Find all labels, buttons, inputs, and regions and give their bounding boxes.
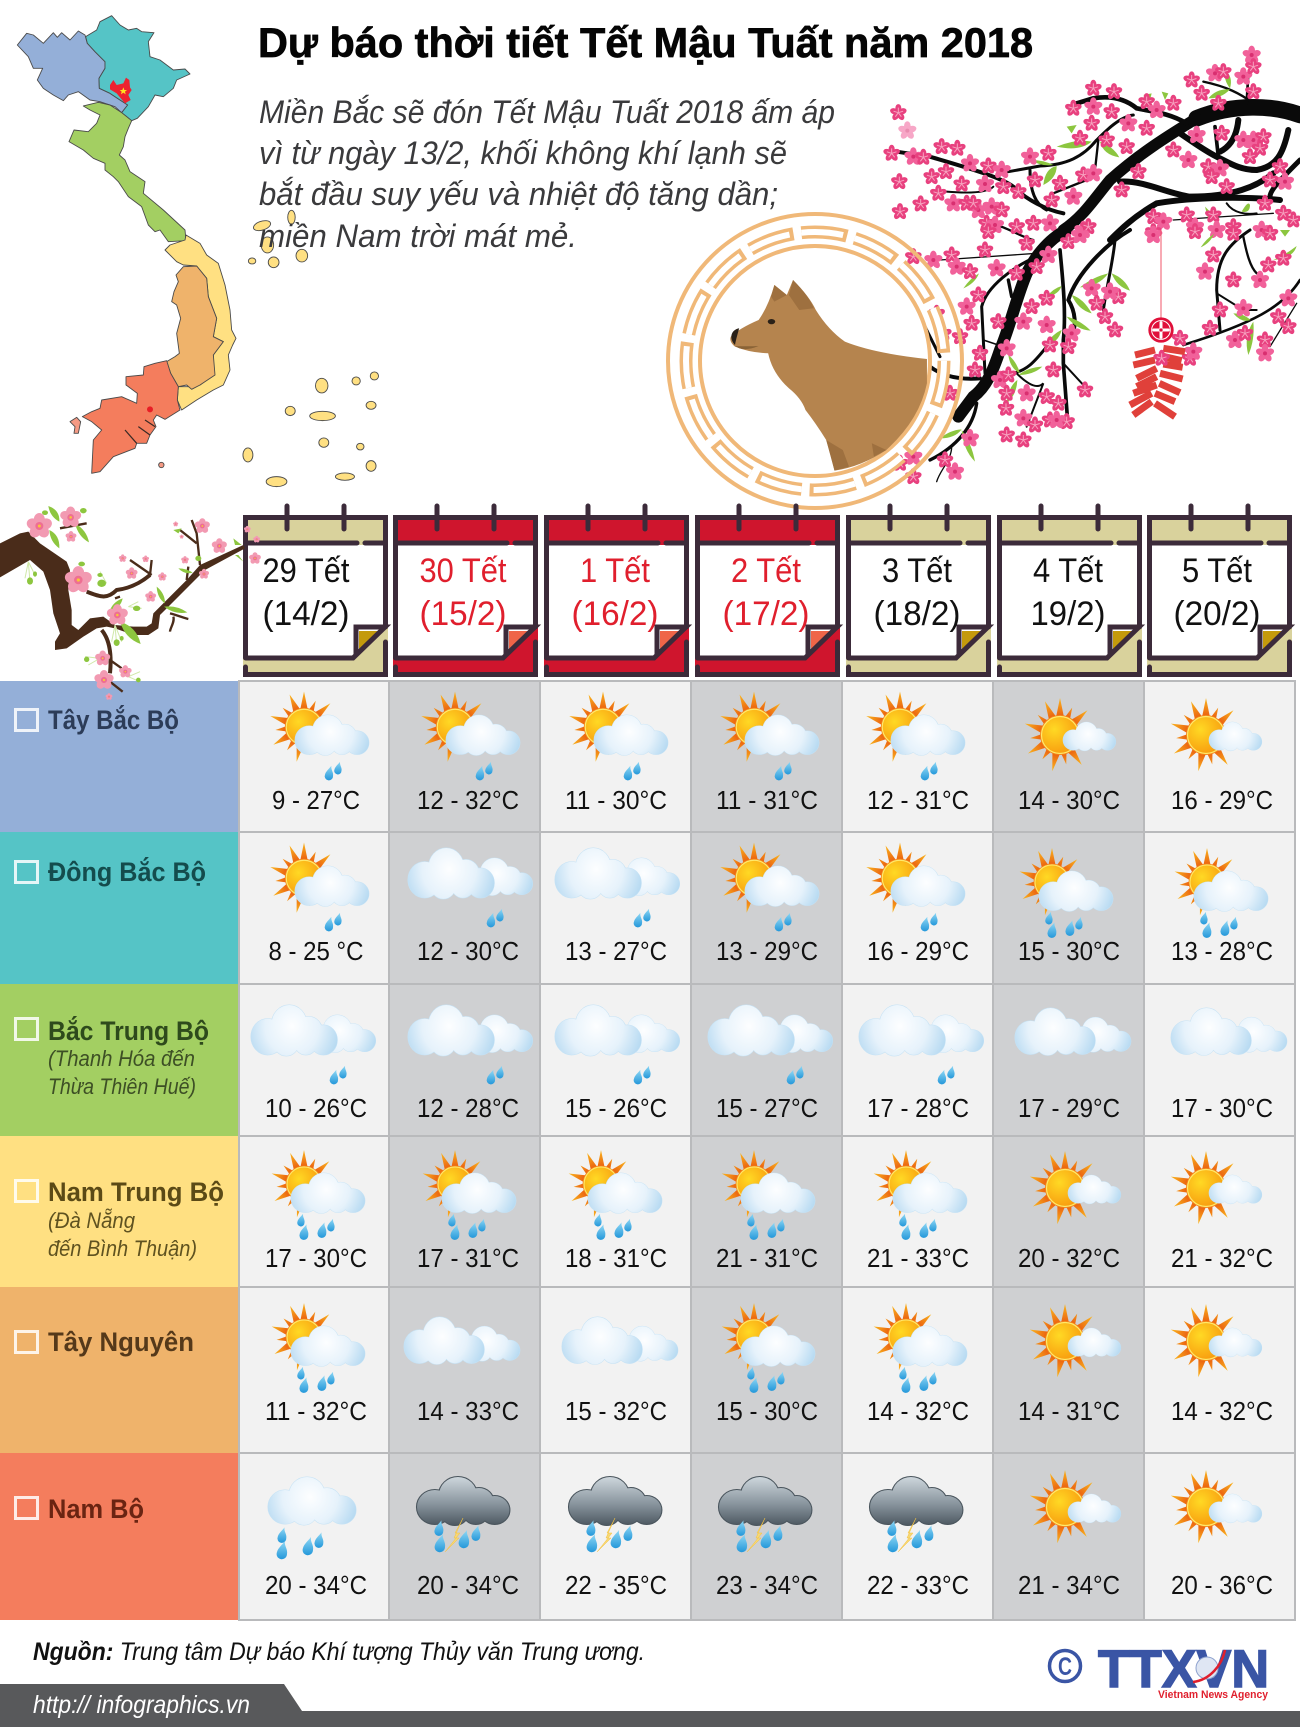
cell: Bắc Trung Bộ 20/2: 17 - 30°C [1171,1093,1273,1123]
cell: Nam Trung Bộ 18/2: 21 - 33°C [867,1243,969,1273]
map: Côn Đảo island [159,462,164,468]
cell: Đông Bắc Bộ 17/2 [691,832,842,984]
region label: Nam Bộ: Nam Bộ [48,1494,144,1524]
intro text: bắt đầu suy yếu và nhiệt độ tăng dần; [259,176,778,212]
cell: Đông Bắc Bộ 15/2: 12 - 30°C [417,936,519,966]
cell: Bắc Trung Bộ 16/2: 15 - 26°C [565,1093,667,1123]
peach blossom branch, lower part [891,223,1300,485]
cell: Đông Bắc Bộ 19/2: 15 - 30°C [1018,936,1120,966]
cell: Đông Bắc Bộ 18/2: 16 - 29°C [867,936,969,966]
cell: Tây Bắc Bộ 16/2: 11 - 30°C [565,785,667,815]
cell: Tây Bắc Bộ 18/2 [842,681,993,832]
map region: Nam Trung Bộ [165,235,236,410]
pale blossom stems [25,562,142,682]
cell: Đông Bắc Bộ 16/2: 13 - 27°C [565,936,667,966]
region label: Tây Nguyên: Tây Nguyên [48,1327,194,1357]
cell: Tây Nguyên 14/2: 11 - 32°C [265,1396,367,1426]
cell: Nam Trung Bộ 14/2 [239,1136,389,1287]
map: Hà Nội [110,78,132,103]
intro text [259,94,835,254]
TTXVN logo [1050,1640,1269,1701]
cell: Nam Bộ 17/2: 23 - 34°C [716,1570,818,1600]
lower leaves [940,234,1297,462]
map region: Đông Bắc Bộ [86,16,190,121]
intro text: miền Nam trời mát mẻ. [259,218,577,254]
cell: Nam Trung Bộ 16/2 [540,1136,691,1287]
cell: Nam Bộ 20/2: 20 - 36°C [1171,1570,1273,1600]
calendar: 29 Tết: (14/2) [262,595,350,633]
cell: Tây Bắc Bộ 15/2 [389,681,540,832]
calendar: 1 Tết [544,506,689,677]
region label: Nam Bộ [0,1453,238,1620]
twigs [87,575,150,673]
fine twigs [60,520,200,692]
cell: Tây Bắc Bộ 14/2 [239,681,389,832]
cell: Tây Nguyên 16/2: 15 - 32°C [565,1396,667,1426]
cell: Bắc Trung Bộ 15/2: 12 - 28°C [417,1093,519,1123]
cell: Nam Trung Bộ 20/2 [1144,1136,1295,1287]
leaves [48,506,243,644]
cell: Tây Bắc Bộ 19/2: 14 - 30°C [1018,785,1120,815]
cell: Nam Bộ 14/2: 20 - 34°C [265,1570,367,1600]
region label: Bắc Trung Bộ: (Thanh Hóa đến [48,1046,195,1071]
peach blossom branch, upper part [883,46,1300,242]
cell: Tây Bắc Bộ 20/2: 16 - 29°C [1171,785,1273,815]
cell: Nam Trung Bộ 14/2: 17 - 30°C [265,1243,367,1273]
cell: Nam Bộ 20/2 [1144,1453,1295,1620]
cell: Bắc Trung Bộ 16/2 [540,984,691,1136]
upper leaves [1032,70,1290,237]
cell: Bắc Trung Bộ 18/2: 17 - 28°C [867,1093,969,1123]
region label: Nam Trung Bộ: Nam Trung Bộ [48,1177,224,1207]
cell: Nam Trung Bộ 19/2: 20 - 32°C [1018,1243,1120,1273]
map of Vietnam [17,16,379,487]
cell: Nam Bộ 18/2 [842,1453,993,1620]
wordmark: TTXVN [1098,1640,1269,1699]
ring [668,214,962,508]
source note: Nguồn: Trung tâm Dự báo Khí tượng Thủy văn Trung ương. [33,1638,645,1666]
copyright mark: C [1058,1653,1072,1681]
region label: Bắc Trung Bộ: Thừa Thiên Huế) [48,1074,196,1099]
cell: Tây Nguyên 18/2: 14 - 32°C [867,1396,969,1426]
cell: Tây Bắc Bộ 20/2 [1144,681,1295,832]
cell: Bắc Trung Bộ 18/2 [842,984,993,1136]
cell: Tây Bắc Bộ 16/2 [540,681,691,832]
cell: Nam Bộ 15/2 [389,1453,540,1620]
footer bar [0,1684,1300,1727]
cell: Nam Trung Bộ 15/2 [389,1136,540,1287]
cell: Tây Nguyên 20/2 [1144,1287,1295,1453]
calendar: 4 Tết: 19/2) [1030,595,1106,633]
intro text: Miền Bắc sẽ đón Tết Mậu Tuất 2018 ấm áp [259,94,835,130]
globe [1193,1650,1225,1682]
cell: Nam Trung Bộ 17/2 [691,1136,842,1287]
intro text: vì từ ngày 13/2, khối không khí lạnh sẽ [259,135,787,171]
region label: Tây Bắc Bộ [0,681,238,832]
map: northern regions [17,16,190,242]
calendar: 29 Tết [243,506,388,677]
cell: Nam Bộ 16/2: 22 - 35°C [565,1570,667,1600]
cell: Đông Bắc Bộ 19/2 [993,832,1144,984]
cell: Nam Bộ 17/2 [691,1453,842,1620]
region label: Nam Trung Bộ: đến Bình Thuận) [48,1236,197,1261]
region label: Đông Bắc Bộ [0,832,238,984]
cell: Tây Bắc Bộ 18/2: 12 - 31°C [867,785,969,815]
cell: Nam Bộ 19/2 [993,1453,1144,1620]
upper blossoms [883,46,1300,242]
cell: Tây Bắc Bộ 17/2: 11 - 31°C [716,785,818,815]
cell: Tây Nguyên 14/2 [239,1287,389,1453]
zodiac medallion [668,214,962,508]
cell: Tây Nguyên 15/2: 14 - 33°C [417,1396,519,1426]
cell: Đông Bắc Bộ 20/2 [1144,832,1295,984]
islands: Hoàng Sa and Trường Sa [243,210,379,487]
calendar: 4 Tết [997,506,1142,677]
region label: Nam Trung Bộ: (Đà Nẵng [48,1208,136,1233]
cell: Đông Bắc Bộ 14/2: 8 - 25 °C [268,936,364,966]
cell: Bắc Trung Bộ 19/2: 17 - 29°C [1018,1093,1120,1123]
cell: Tây Nguyên 20/2: 14 - 32°C [1171,1396,1273,1426]
region label: Tây Bắc Bộ: Tây Bắc Bộ [48,704,179,735]
cell: Nam Bộ 19/2: 21 - 34°C [1018,1570,1120,1600]
calendar: 1 Tết: (16/2) [572,595,658,633]
cell: Tây Nguyên 15/2 [389,1287,540,1453]
calendar: 2 Tết: (17/2) [722,595,810,633]
cell: Tây Nguyên 19/2 [993,1287,1144,1453]
map region: Bắc Trung Bộ [69,102,186,242]
cell: Tây Nguyên 17/2 [691,1287,842,1453]
small blossom branch [0,506,262,700]
region label: Tây Nguyên [0,1287,238,1453]
cell: Nam Bộ 16/2 [540,1453,691,1620]
calendar: 30 Tết [393,506,538,677]
cell: Đông Bắc Bộ 14/2 [239,832,389,984]
hanging string [1159,230,1162,318]
cell: Bắc Trung Bộ 17/2 [691,984,842,1136]
region label: Bắc Trung Bộ: Bắc Trung Bộ [48,1015,209,1046]
cell: Nam Trung Bộ 20/2: 21 - 32°C [1171,1243,1273,1273]
cell: Nam Bộ 15/2: 20 - 34°C [417,1570,519,1600]
flowers [25,506,262,700]
cell: Đông Bắc Bộ 18/2 [842,832,993,984]
region label: Nam Trung Bộ [0,1136,238,1287]
lower branches [923,230,1300,482]
cell: Tây Nguyên 19/2: 14 - 31°C [1018,1396,1120,1426]
cell: Nam Bộ 14/2 [239,1453,389,1620]
cell: Bắc Trung Bộ 14/2 [239,984,389,1136]
agency name: Vietnam News Agency [1158,1689,1269,1701]
map: Mekong delta channels [125,420,155,443]
map region: Nam Bộ [82,361,180,473]
dog [730,280,927,471]
cell: Nam Trung Bộ 19/2 [993,1136,1144,1287]
region label: Đông Bắc Bộ: Đông Bắc Bộ [48,856,206,887]
trunk [0,532,245,650]
calendar: 30 Tết: (15/2) [420,595,506,633]
cell: Tây Nguyên 17/2: 15 - 30°C [716,1396,818,1426]
map region: Tây Bắc Bộ [17,31,128,113]
calendar: 5 Tết [1147,506,1292,677]
cell: Nam Trung Bộ 18/2 [842,1136,993,1287]
cell: Nam Trung Bộ 16/2: 18 - 31°C [565,1243,667,1273]
cell: Bắc Trung Bộ 15/2 [389,984,540,1136]
map: Ho Chi Minh City dot [147,406,153,412]
upper branches [897,73,1300,240]
cell: Bắc Trung Bộ 20/2 [1144,984,1295,1136]
cell: Tây Nguyên 18/2 [842,1287,993,1453]
calendar: 2 Tết: 2 Tết [731,552,801,590]
cell: Bắc Trung Bộ 14/2: 10 - 26°C [265,1093,367,1123]
cell: Tây Nguyên 16/2 [540,1287,691,1453]
map: Phú Quốc island [70,417,81,433]
green buds [27,508,201,682]
calendar: 5 Tết: 5 Tết [1182,552,1252,590]
calendar: 5 Tết: (20/2) [1174,595,1260,633]
cell: Bắc Trung Bộ 17/2: 15 - 27°C [716,1093,818,1123]
cell: Tây Bắc Bộ 17/2 [691,681,842,832]
lower blossoms [891,223,1298,485]
calendar: 2 Tết [695,506,840,677]
cell: Bắc Trung Bộ 19/2 [993,984,1144,1136]
calendar: 29 Tết: 29 Tết [262,552,350,590]
cell: Nam Trung Bộ 15/2: 17 - 31°C [417,1243,519,1273]
calendar: 3 Tết: 3 Tết [882,552,952,590]
calendar: 3 Tết [846,506,991,677]
cell: Tây Bắc Bộ 19/2 [993,681,1144,832]
firecrackers [1130,348,1185,417]
map: southern regions [70,235,236,473]
map region: Tây Nguyên [167,266,223,389]
website URL: http:// infographics.vn [33,1691,250,1719]
cell: Nam Trung Bộ 17/2: 21 - 31°C [716,1243,818,1273]
map: capital star [120,87,127,94]
calendar: 30 Tết: 30 Tết [420,552,507,590]
cell: Đông Bắc Bộ 15/2 [389,832,540,984]
cell: Đông Bắc Bộ 17/2: 13 - 29°C [716,936,818,966]
calendar: 4 Tết: 4 Tết [1033,552,1103,590]
cell: Tây Bắc Bộ 14/2: 9 - 27°C [272,785,360,815]
copyright mark [1050,1650,1080,1682]
lucky charm knot [1148,317,1174,343]
cell: Tây Bắc Bộ 15/2: 12 - 32°C [417,785,519,815]
calendar: 1 Tết: 1 Tết [580,552,650,590]
region label: Bắc Trung Bộ [0,984,238,1136]
cell: Đông Bắc Bộ 20/2: 13 - 28°C [1171,936,1273,966]
calendar: 3 Tết: (18/2) [874,595,960,633]
cell: Đông Bắc Bộ 16/2 [540,832,691,984]
title: Dự báo thời tiết Tết Mậu Tuất năm 2018 [258,19,1033,66]
cell: Nam Bộ 18/2: 22 - 33°C [867,1570,969,1600]
